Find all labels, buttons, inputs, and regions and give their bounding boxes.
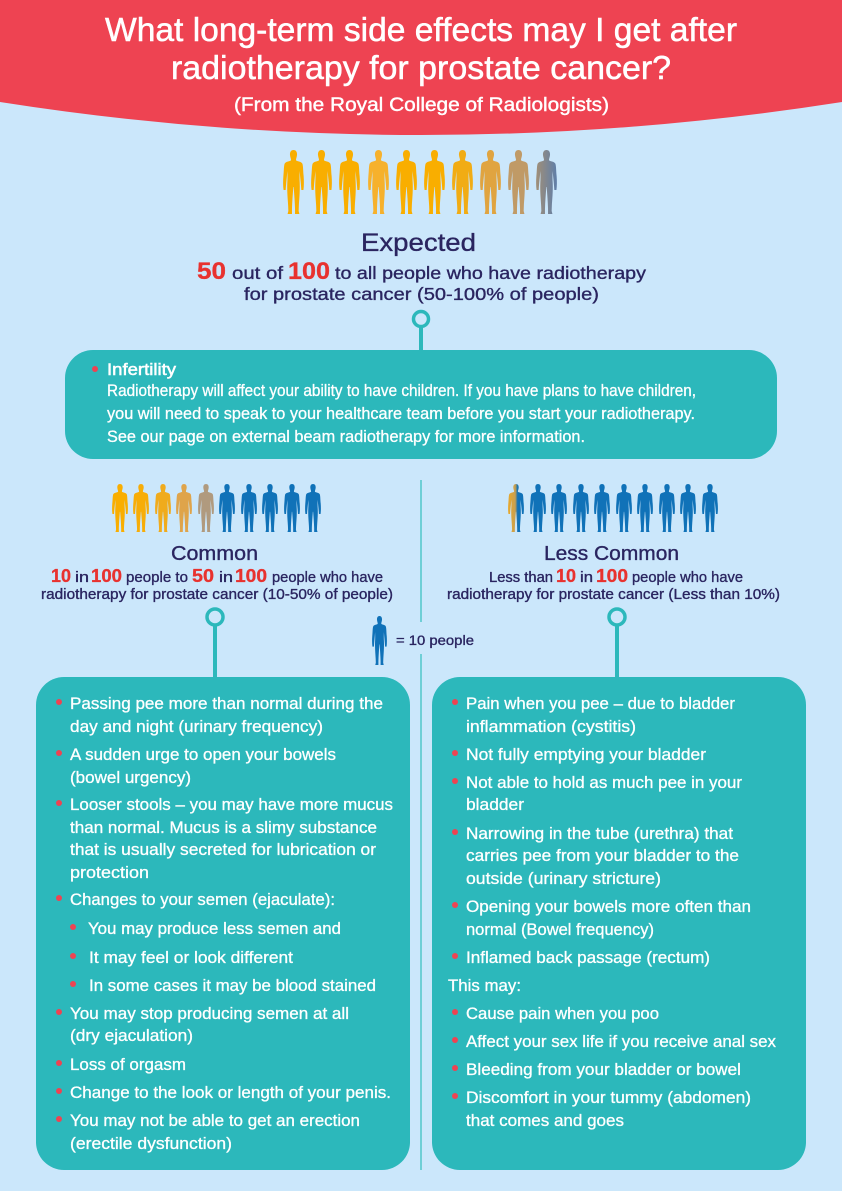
panel: less common side effects: Discomfort in your tummy (abdomen) (466, 1089, 751, 1107)
icon row: expected, 10 people (283, 150, 557, 214)
panel: common side effects: (erectile dysfunction) (70, 1135, 232, 1153)
common frequency text: 10 (51, 566, 71, 586)
connector: less common (609, 609, 625, 680)
legend: one figure equals 10 people: = 10 people (396, 632, 474, 648)
panel: common side effects (36, 677, 410, 1170)
less common frequency text: Less than (489, 570, 553, 586)
panel: infertility: you will need to speak to your healthcare team before you start your radiotherapy. (107, 405, 695, 423)
panel: less common side effects: outside (urinary stricture) (466, 870, 661, 888)
icon row: less common (508, 484, 718, 532)
common frequency text: in (75, 570, 89, 586)
expected frequency text: for prostate cancer (50-100% of people) (244, 284, 599, 304)
panel: common side effects: protection (70, 864, 149, 882)
panel: common side effects: Looser stools – you may have more mucus (70, 796, 393, 814)
panel: less common side effects: normal (Bowel frequency) (466, 921, 654, 939)
panel: less common side effects: bladder (466, 796, 525, 814)
common frequency text: people who have (272, 570, 383, 586)
less common frequency text: in (580, 570, 593, 586)
panel: common side effects: day and night (urinary frequency) (70, 718, 323, 736)
panel: less common side effects: Bleeding from your bladder or bowel (466, 1061, 741, 1079)
heading: expected: Expected (361, 229, 476, 257)
panel: common side effects: Changes to your semen (ejaculate): (70, 891, 335, 909)
panel: less common side effects: carries pee from your bladder to the (466, 847, 739, 865)
header banner (0, 0, 842, 135)
panel: less common side effects: Not fully emptying your bladder (466, 746, 707, 764)
common frequency text: people to (126, 570, 188, 586)
panel: common side effects: You may produce less semen and (88, 920, 341, 938)
panel: common side effects: You may stop producing semen at all (70, 1005, 349, 1023)
expected frequency text: 50 (197, 258, 226, 285)
title (105, 11, 737, 86)
heading: common: Common (171, 543, 258, 565)
panel: less common side effects: that comes and goes (466, 1112, 624, 1130)
expected frequency text (197, 258, 646, 304)
subtitle: (From the Royal College of Radiologists) (234, 95, 609, 116)
panel: less common side effects: inflammation (cystitis) (466, 718, 636, 736)
panel: common side effects: Loss of orgasm (70, 1056, 186, 1074)
connector: expected to infertility (414, 312, 428, 352)
panel: common side effects: A sudden urge to open your bowels (70, 746, 336, 764)
panel: less common side effects (432, 677, 806, 1170)
panel: less common side effects: Affect your sex life if you receive anal sex (466, 1033, 777, 1051)
panel: infertility: Infertility (107, 361, 177, 379)
common frequency text: 100 (91, 566, 122, 586)
panel: common side effects: than normal. Mucus is a slimy substance (70, 819, 377, 837)
expected frequency text: 100 (288, 258, 330, 285)
panel: common side effects: Change to the look or length of your penis. (70, 1084, 391, 1102)
panel: common side effects: (dry ejaculation) (70, 1027, 193, 1045)
panel: infertility: See our page on external beam radiotherapy for more information. (107, 428, 585, 446)
title: radiotherapy for prostate cancer? (171, 49, 671, 86)
common frequency text: 100 (235, 566, 267, 586)
connector: common (207, 609, 223, 680)
common frequency text: in (219, 570, 233, 586)
panel: common side effects: Passing pee more than normal during the (70, 695, 383, 713)
panel: infertility (65, 350, 777, 459)
panel: common side effects: In some cases it may be blood stained (89, 977, 376, 995)
panel: less common side effects: Inflamed back passage (rectum) (466, 949, 710, 967)
expected frequency text: out of (232, 263, 283, 283)
heading: less common: Less Common (544, 543, 679, 565)
panel: common side effects: It may feel or look different (89, 949, 293, 967)
panel: less common side effects: Opening your bowels more often than (466, 898, 751, 916)
common frequency text: radiotherapy for prostate cancer (10-50% of people) (41, 587, 393, 603)
panel: less common side effects: Pain when you pee – due to bladder (466, 695, 736, 713)
panel: less common side effects: Not able to hold as much pee in your (466, 774, 743, 792)
common frequency text (41, 566, 393, 603)
legend: one figure equals 10 people (372, 616, 474, 665)
panel: common side effects: that is usually secreted for lubrication or (70, 841, 377, 859)
panel: common side effects: You may not be able to get an erection (70, 1112, 360, 1130)
less common frequency text: radiotherapy for prostate cancer (Less than 10%) (447, 587, 780, 603)
less common frequency text (447, 566, 780, 603)
expected frequency text: to all people who have radiotherapy (335, 263, 646, 283)
panel: less common side effects: Cause pain when you poo (466, 1005, 659, 1023)
panel: infertility: Radiotherapy will affect your ability to have children. If you have plans to have children, (107, 382, 696, 400)
common frequency text: 50 (192, 566, 214, 586)
less common frequency text: 10 (556, 566, 576, 586)
panel: less common side effects: Narrowing in the tube (urethra) that (466, 825, 733, 843)
panel: less common side effects: This may: (448, 977, 521, 995)
title: What long-term side effects may I get after (105, 11, 737, 48)
less common frequency text: 100 (596, 566, 628, 586)
center divider (420, 480, 422, 1170)
icon row: common (112, 484, 321, 532)
panel: common side effects: (bowel urgency) (70, 769, 191, 787)
less common frequency text: people who have (632, 570, 743, 586)
